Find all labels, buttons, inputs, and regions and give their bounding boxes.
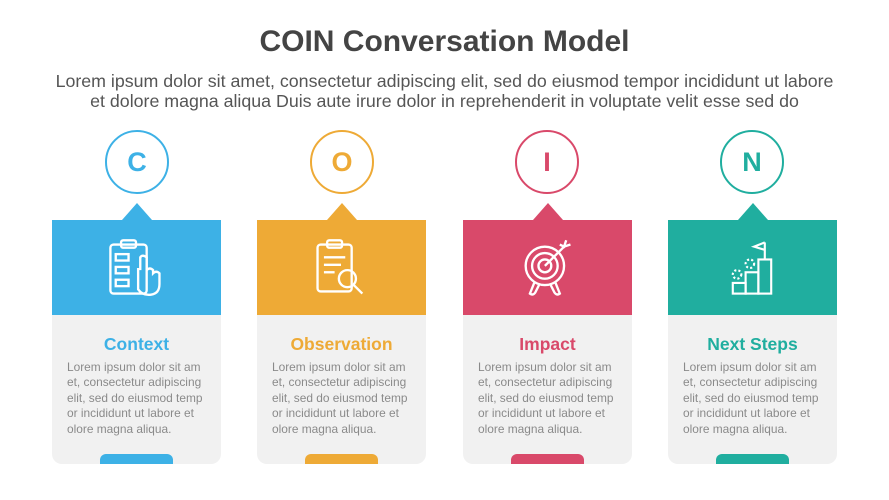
text (478, 360, 614, 436)
icon: clipboard (109, 239, 161, 296)
text: elit, sed do eiusmod temp (67, 391, 202, 405)
circle O (310, 130, 374, 194)
heading: Impact (519, 334, 576, 354)
text: olore magna aliqua. (478, 422, 582, 436)
text: olore magna aliqua. (683, 422, 787, 436)
text: elit, sed do eiusmod temp (272, 391, 408, 405)
text: elit, sed do eiusmod temp (683, 391, 818, 405)
text (683, 360, 818, 436)
text: Lorem ipsum dolor sit am (272, 360, 406, 374)
heading: Observation (290, 334, 393, 354)
heading: Context (104, 334, 169, 354)
text: Lorem ipsum dolor sit am (478, 360, 612, 374)
text: et, consectetur adipiscing (478, 375, 612, 389)
circle I (515, 130, 579, 194)
panel: context (52, 203, 221, 464)
text: olore magna aliqua. (67, 422, 171, 436)
text: et, consectetur adipiscing (67, 375, 201, 389)
circle O: O (331, 147, 352, 177)
panel: impact (463, 203, 632, 464)
text: or incididunt ut labore et (272, 406, 399, 420)
title: COIN Conversation Model (259, 25, 630, 58)
circle N (720, 130, 784, 194)
subtitle: et dolore magna aliqua Duis aute irure dolor in reprehenderit in voluptate velit esse sed do (90, 91, 799, 111)
text: elit, sed do eiusmod temp (478, 391, 614, 405)
subtitle: Lorem ipsum dolor sit amet, consectetur adipiscing elit, sed do eiusmod tempor incididunt ut labore (56, 71, 833, 91)
text: Lorem ipsum dolor sit am (683, 360, 816, 374)
text (67, 360, 202, 436)
circle C: C (127, 147, 147, 177)
panel: next steps (668, 203, 837, 464)
text: et, consectetur adipiscing (683, 375, 817, 389)
text: or incididunt ut labore et (478, 406, 605, 420)
text: or incididunt ut labore et (683, 406, 810, 420)
icon: clipboard search (316, 239, 364, 294)
subtitle (56, 71, 833, 111)
text: olore magna aliqua. (272, 422, 376, 436)
circle I: I (543, 147, 551, 177)
text (272, 360, 408, 436)
icon: target (524, 240, 571, 296)
panel: observation (257, 203, 426, 464)
circle N: N (742, 147, 762, 177)
text: or incididunt ut labore et (67, 406, 194, 420)
text: Lorem ipsum dolor sit am (67, 360, 200, 374)
heading: Next Steps (707, 334, 798, 354)
icon: steps flag (732, 241, 772, 295)
text: et, consectetur adipiscing (272, 375, 406, 389)
circle C (105, 130, 169, 194)
